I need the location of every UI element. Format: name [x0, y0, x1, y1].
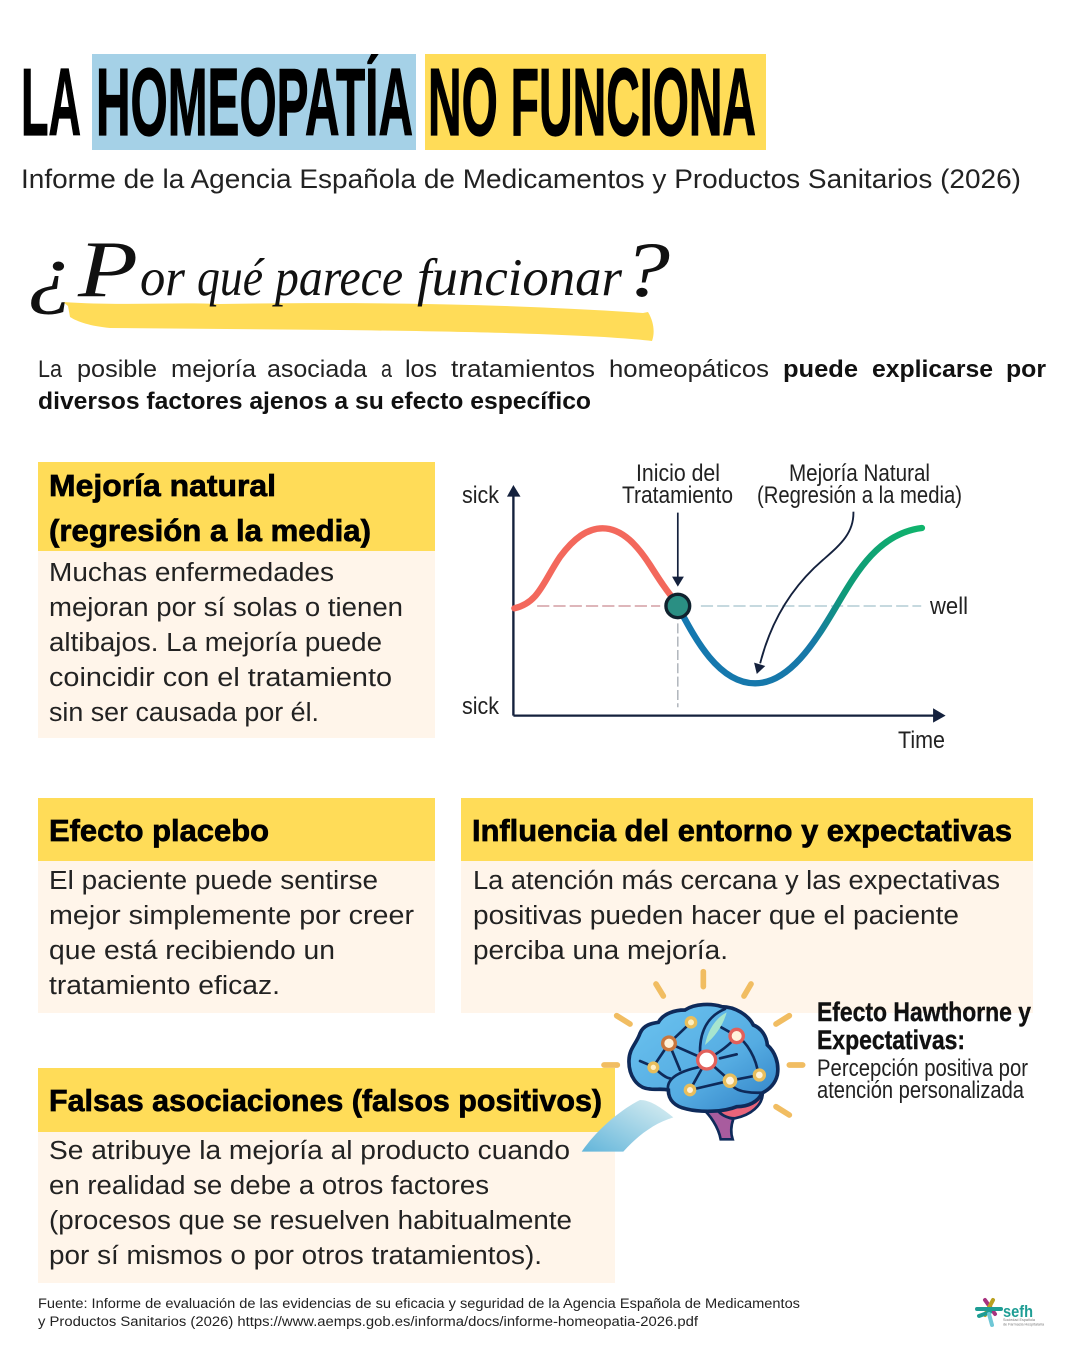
- cerebellum: [717, 1095, 763, 1118]
- heading script text: funcionar: [417, 249, 622, 307]
- logo tagline: de Farmacia Hospitalaria: [1003, 1322, 1045, 1326]
- subtitle: Informe de la Agencia Española de Medicamentos y Productos Sanitarios (2026): [21, 164, 1021, 194]
- panel text: por sí mismos o por otros tratamientos).: [49, 1242, 542, 1270]
- heading script text: or: [140, 249, 185, 307]
- chart: regresión a la media: [462, 460, 968, 754]
- panel text: mejoran por sí solas o tienen: [49, 594, 403, 622]
- chart labels: sick: [462, 482, 500, 509]
- panel heading: mejoría natural: Mejoría natural: [49, 468, 276, 503]
- callout: efecto hawthorne: Percepción positiva por: [817, 1055, 1028, 1082]
- intro paragraph: por: [1006, 356, 1046, 383]
- chart labels: sick: [462, 693, 500, 720]
- neural nodes: [649, 1018, 764, 1095]
- panel heading: mejoría natural: (regresión a la media): [49, 513, 371, 548]
- intro paragraph: La: [38, 356, 63, 383]
- brain stem: [702, 1108, 733, 1139]
- heading script text: [27, 226, 670, 315]
- panel heading: falsas asociaciones: [38, 1068, 615, 1132]
- intro paragraph: asociada: [267, 356, 368, 383]
- rays: [604, 972, 803, 1115]
- chart labels: well: [929, 593, 968, 620]
- intro paragraph: explicarse: [872, 356, 993, 383]
- panel: influencia del entorno: [461, 798, 1033, 1013]
- panel text: sin ser causada por él.: [49, 699, 319, 727]
- title: HOMEOPATÍA: [96, 49, 413, 156]
- chart labels: Inicio del: [636, 460, 720, 487]
- icon: brain with rays: [582, 972, 803, 1152]
- chart labels: [462, 460, 968, 754]
- source footnote: y Productos Sanitarios (2026) https://www.aemps.gob.es/informa/docs/informe-homeopatia-2026.pdf: [38, 1314, 698, 1329]
- panel heading: influencia del entorno: [461, 798, 1033, 861]
- title highlight: homeopatía: [92, 54, 416, 150]
- panel text: positivas pueden hacer que el paciente: [473, 902, 959, 930]
- panel text: [49, 1137, 572, 1270]
- heading script text: ¿: [27, 228, 75, 315]
- neural lines: [640, 1009, 762, 1093]
- intro paragraph: posible: [77, 356, 157, 383]
- panel text: La atención más cercana y las expectativas: [473, 867, 1000, 895]
- panel: efecto placebo: [38, 798, 435, 1013]
- heading script text: parece: [271, 249, 403, 307]
- brush highlight: [63, 302, 654, 341]
- title highlight: no funciona: [425, 54, 766, 150]
- panel text: que está recibiendo un: [49, 937, 335, 965]
- panel text: Muchas enfermedades: [49, 559, 334, 587]
- panel text: [49, 867, 415, 1000]
- logo tagline: [1003, 1317, 1045, 1326]
- chart graphics: [507, 485, 946, 723]
- source footnote: [38, 1296, 800, 1329]
- heading script text: qué: [197, 249, 265, 307]
- callout: efecto hawthorne: Efecto Hawthorne y: [817, 997, 1031, 1027]
- heading script text: P: [77, 226, 138, 314]
- panel heading: falsas asociaciones: Falsas asociaciones (falsos positivos): [49, 1083, 602, 1118]
- brain: [629, 1004, 778, 1139]
- panel heading: efecto placebo: [38, 798, 435, 861]
- intro paragraph: puede: [783, 356, 858, 383]
- panel text: Se atribuye la mejoría al producto cuando: [49, 1137, 570, 1165]
- intro paragraph: homeopáticos: [609, 356, 769, 383]
- intro paragraph: [38, 356, 1046, 415]
- intro paragraph: los: [405, 356, 437, 383]
- title: LA: [21, 49, 81, 156]
- callout: efecto hawthorne: Expectativas:: [817, 1025, 965, 1055]
- swoosh: [582, 1100, 673, 1152]
- panel text: tratamiento eficaz.: [49, 972, 280, 1000]
- panel text: [473, 867, 1000, 965]
- panel: falsas asociaciones: [38, 1068, 615, 1283]
- logo mark: [977, 1300, 1001, 1325]
- panel text: altibajos. La mejoría puede: [49, 629, 382, 657]
- panel text: mejor simplemente por creer: [49, 902, 415, 930]
- panel text: en realidad se debe a otros factores: [49, 1172, 489, 1200]
- logo wordmark: sefh: [1003, 1302, 1033, 1321]
- callout: efecto hawthorne: atención personalizada: [817, 1077, 1025, 1104]
- intro paragraph: diversos factores ajenos a su efecto específico: [38, 388, 591, 415]
- panel heading: influencia del entorno: Influencia del entorno y expectativas: [472, 813, 1012, 848]
- source footnote: Fuente: Informe de evaluación de las evidencias de su eficacia y seguridad de la Agencia Española de Medicamentos: [38, 1296, 800, 1311]
- intro paragraph: mejoría: [171, 356, 257, 383]
- panel text: (procesos que se resuelven habitualmente: [49, 1207, 572, 1235]
- panel text: El paciente puede sentirse: [49, 867, 378, 895]
- chart labels: (Regresión a la media): [757, 482, 962, 509]
- chart labels: Time: [898, 727, 945, 754]
- panel text: perciba una mejoría.: [473, 937, 728, 965]
- logo tagline: Sociedad Española: [1003, 1317, 1036, 1322]
- panel heading: efecto placebo: Efecto placebo: [49, 813, 269, 848]
- chart labels: Tratamiento: [622, 482, 733, 509]
- heading script text: ?: [622, 226, 670, 313]
- highlight: [705, 1012, 727, 1045]
- panel text: coincidir con el tratamiento: [49, 664, 392, 692]
- panel heading: mejoría natural: [38, 462, 435, 551]
- cerebrum: [629, 1004, 778, 1111]
- logo: sefh: [977, 1300, 1045, 1326]
- intro paragraph: tratamientos: [451, 356, 595, 383]
- panel text: [49, 559, 403, 727]
- intro paragraph: a: [381, 356, 393, 383]
- panel: mejoría natural: [38, 462, 435, 738]
- callout: efecto hawthorne: [817, 997, 1031, 1104]
- chart labels: Mejoría Natural: [789, 460, 930, 487]
- section heading: [27, 226, 670, 341]
